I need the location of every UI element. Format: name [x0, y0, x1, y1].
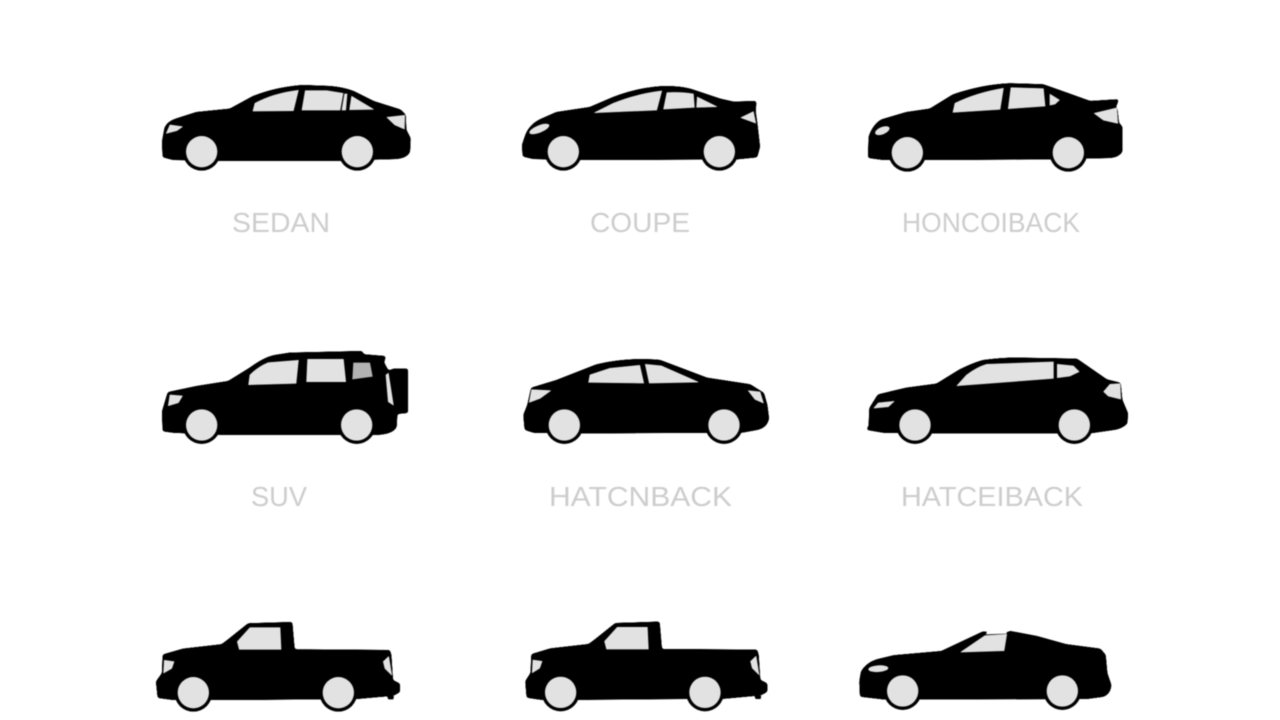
panel: pickup truck two	[526, 622, 767, 711]
panel: targa sports car	[860, 631, 1111, 710]
panel: fastback sedan	[524, 360, 768, 512]
panel: sedan	[163, 86, 410, 238]
label: hatchback: HATCEIBACK	[901, 481, 1083, 512]
icon: pickup silhouette one	[157, 623, 399, 712]
label: sedan: SEDAN	[232, 207, 330, 238]
panel: hatchback	[867, 358, 1127, 512]
icon: spoiler sedan silhouette	[869, 84, 1122, 172]
icon: targa sports car silhouette	[860, 631, 1111, 710]
icon: suv silhouette	[163, 352, 407, 444]
icon: pickup silhouette two	[526, 622, 767, 711]
icon: coupe silhouette	[523, 87, 759, 171]
panel: coupe	[523, 87, 759, 238]
label: suv: SUV	[251, 481, 307, 512]
panel: spoiler sedan	[869, 84, 1122, 238]
panel: suv	[163, 352, 407, 512]
label: fastback sedan: HATCNBACK	[549, 481, 732, 512]
icon: fastback sedan silhouette	[524, 360, 768, 444]
label: coupe: COUPE	[590, 207, 690, 238]
icon: hatchback silhouette	[867, 358, 1127, 444]
icon: sedan silhouette	[163, 86, 410, 171]
panel: pickup truck one	[157, 623, 399, 712]
label: third top-row type: HONCOIBACK	[902, 207, 1080, 238]
